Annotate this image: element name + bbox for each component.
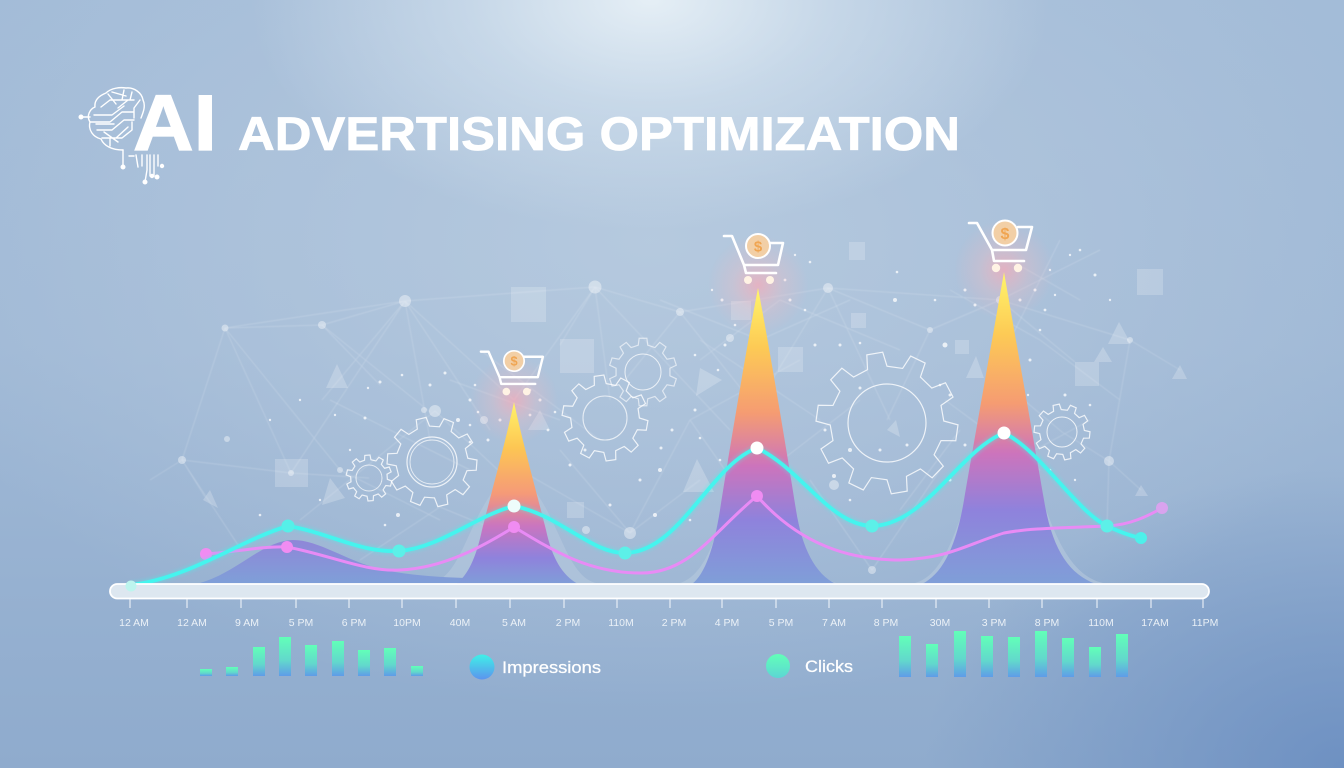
legend: impressions: Impressions bbox=[502, 658, 601, 677]
legend: clicks: Clicks bbox=[805, 657, 853, 676]
scattered particles bbox=[259, 249, 1111, 526]
gear: left medium bbox=[384, 415, 480, 509]
axis time labels: 5 PM bbox=[769, 617, 793, 629]
right bar chart bbox=[899, 631, 1128, 677]
axis time labels: 4 PM bbox=[715, 617, 739, 629]
cart 2 bbox=[724, 234, 783, 284]
axis time labels: 5 AM bbox=[502, 617, 526, 629]
title: AI bbox=[133, 78, 217, 167]
peak 2 bbox=[692, 288, 836, 584]
gear: centre bbox=[556, 369, 654, 467]
network of connected nodes bbox=[150, 240, 1180, 570]
title bbox=[133, 78, 960, 167]
axis time labels: 17AM bbox=[1141, 617, 1169, 629]
floating translucent triangles bbox=[203, 322, 1187, 508]
gear: centre upper bbox=[601, 330, 685, 414]
timeline axis bar bbox=[110, 584, 1209, 598]
low hump area bbox=[200, 540, 470, 583]
axis time labels: 12 AM bbox=[119, 617, 149, 629]
axis time labels: 11PM bbox=[1192, 617, 1218, 629]
axis time labels: 10PM bbox=[393, 617, 421, 629]
left bar chart bbox=[200, 637, 423, 676]
magenta clicks line bbox=[200, 490, 1168, 573]
axis ticks bbox=[130, 599, 1203, 608]
axis time labels: 110M bbox=[608, 617, 634, 629]
cart 1: $ bbox=[510, 354, 518, 369]
floating translucent squares bbox=[275, 242, 1163, 518]
cart 1 bbox=[481, 351, 543, 395]
axis time labels bbox=[119, 617, 1218, 629]
axis time labels: 9 AM bbox=[235, 617, 259, 629]
pale halos around peaks bbox=[432, 420, 1103, 583]
cyan impressions line bbox=[131, 426, 1147, 585]
legend: clicks bbox=[766, 654, 853, 678]
gear: right small bbox=[1031, 402, 1093, 462]
axis time labels: 40M bbox=[450, 617, 470, 629]
axis time labels: 110M bbox=[1088, 617, 1114, 629]
peak 3 bbox=[922, 272, 1096, 584]
network hub dots bbox=[178, 280, 1133, 574]
axis time labels: 30M bbox=[930, 617, 950, 629]
axis time labels: 7 AM bbox=[822, 617, 846, 629]
axis time labels: 8 PM bbox=[1035, 617, 1059, 629]
cart 3: $ bbox=[1001, 226, 1010, 243]
axis time labels: 2 PM bbox=[662, 617, 686, 629]
icon: circuit brain bbox=[79, 88, 164, 184]
axis time labels: 8 PM bbox=[874, 617, 898, 629]
gear: left small bbox=[341, 451, 397, 505]
legend: impressions bbox=[470, 654, 601, 680]
gear: large right bbox=[807, 344, 967, 502]
peak glows bbox=[470, 220, 1054, 444]
title: ADVERTISING OPTIMIZATION bbox=[238, 107, 960, 160]
gears bbox=[341, 330, 1093, 509]
axis time labels: 2 PM bbox=[556, 617, 580, 629]
axis time labels: 6 PM bbox=[342, 617, 366, 629]
axis time labels: 3 PM bbox=[982, 617, 1006, 629]
peak 1 bbox=[456, 402, 578, 584]
axis time labels: 5 PM bbox=[289, 617, 313, 629]
cart 3 bbox=[969, 220, 1032, 272]
axis time labels: 12 AM bbox=[177, 617, 207, 629]
axis start dot bbox=[126, 580, 136, 592]
cart 2: $ bbox=[754, 238, 763, 256]
